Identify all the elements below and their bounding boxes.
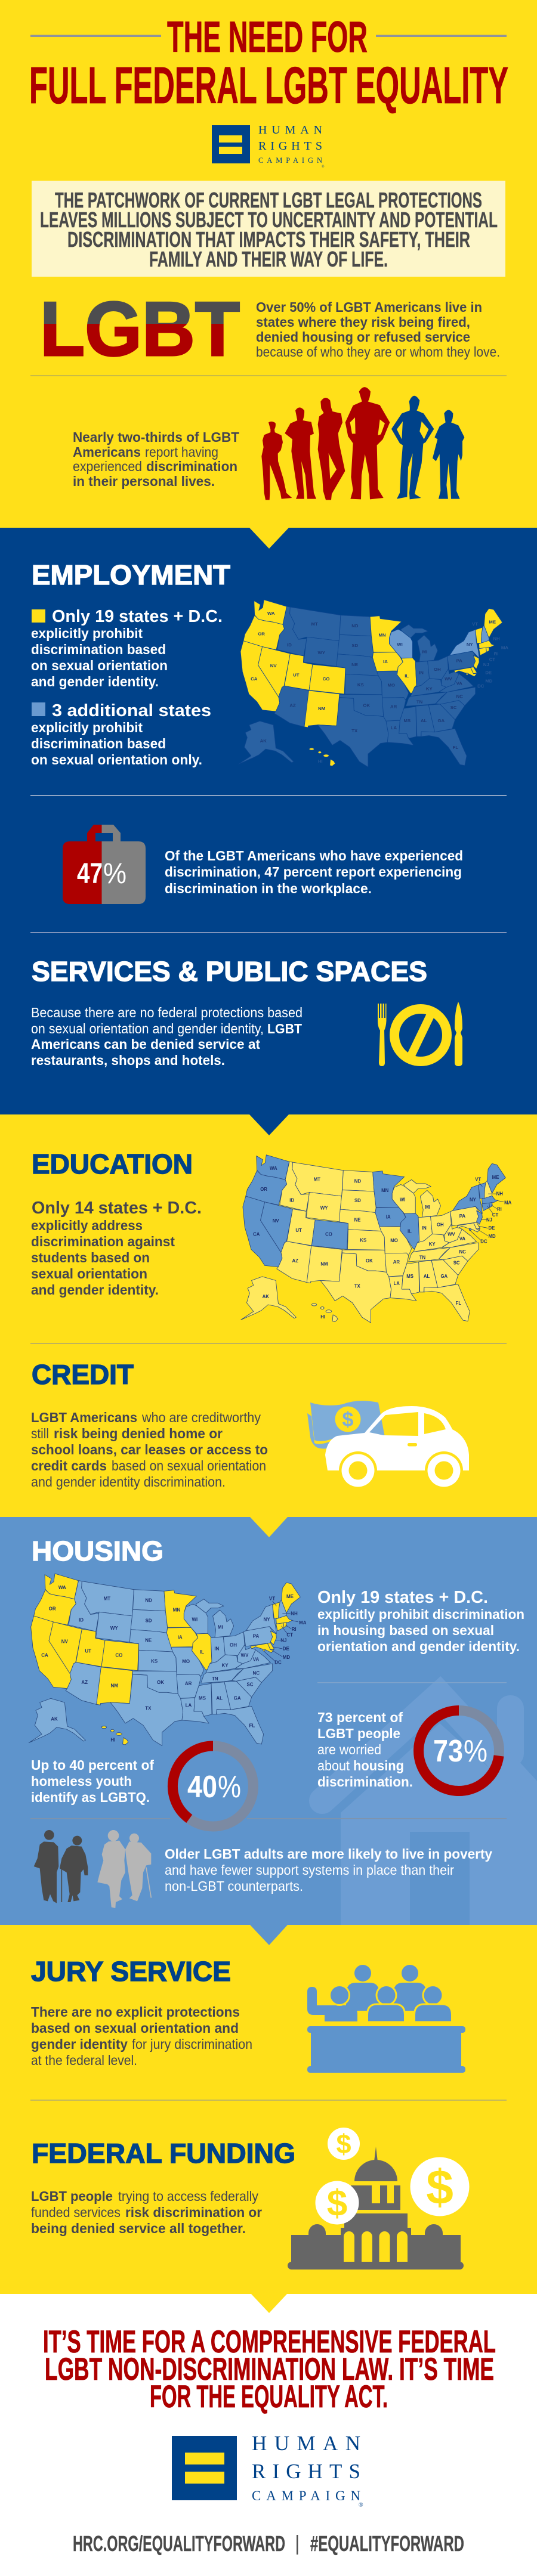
title: THE NEED FOR <box>167 13 368 61</box>
map: employment protections: DC <box>477 683 484 689</box>
text: two-thirds report discrimination: discrimination <box>146 459 237 474</box>
legend: 3 additional states: explicitly prohibit <box>31 720 143 735</box>
icon: briefcase 47 percent: 47 <box>77 858 103 890</box>
heading: federal funding: FEDERAL FUNDING <box>32 2138 295 2169</box>
map: housing protections: RI <box>292 1627 297 1632</box>
text: credit: still <box>31 1426 49 1441</box>
text: workplace discrimination: Of the LGBT Americans who have experienced <box>165 848 463 863</box>
map: housing protections: MA <box>299 1620 307 1626</box>
icon: capitol building with coins: $ <box>426 2160 453 2215</box>
map: housing protections: CO <box>115 1652 122 1658</box>
text: jury service: for jury discrimination <box>132 2036 252 2052</box>
legend: 3 additional states: 3 additional states <box>52 701 211 720</box>
map: education protections: DC <box>480 1239 487 1244</box>
map: education protections: IL <box>408 1228 412 1234</box>
map: housing protections: CT <box>286 1633 293 1638</box>
map: housing protections: WI <box>192 1617 197 1623</box>
map: education protections: NH <box>496 1191 503 1197</box>
chart: 40 percent donut: % <box>218 1770 241 1804</box>
map: employment protections: FL <box>453 745 458 750</box>
map: housing protections: NH <box>291 1611 298 1617</box>
map: housing protections: MD <box>283 1655 290 1660</box>
icon: briefcase 47 percent: % <box>103 858 126 890</box>
map: education protections: WV <box>448 1232 455 1237</box>
text: services: on sexual orientation and gender identity, <box>31 1021 264 1036</box>
logo: Human Rights Campaign <box>212 123 325 169</box>
map: employment protections: RI <box>494 651 499 657</box>
text: services: restaurants, shops and hotels. <box>31 1052 225 1068</box>
map: housing protections: ME <box>286 1594 294 1599</box>
logo: Human Rights Campaign: RIGHTS <box>258 140 322 153</box>
arrow: yellow pointer <box>251 2294 287 2313</box>
icon: jury box <box>307 1965 465 2073</box>
map: education protections: VT <box>475 1176 481 1182</box>
text: 73 percent worried <box>317 1710 413 1789</box>
map: employment protections: MT <box>311 621 318 627</box>
map: education protections: PA <box>459 1213 465 1219</box>
map: education protections: ID <box>289 1197 294 1203</box>
text: 73 percent worried: discrimination. <box>317 1774 413 1789</box>
map: employment protections: IN <box>419 670 424 675</box>
text: jury service: at the federal level. <box>31 2052 137 2068</box>
map: housing protections: GA <box>234 1695 241 1701</box>
logo: Human Rights Campaign: HUMAN <box>258 123 322 137</box>
arrow: light blue pointer <box>250 1925 288 1945</box>
text: services <box>31 1005 303 1068</box>
text: housing protections: in housing based on sexual <box>317 1623 494 1638</box>
map: employment protections: CT <box>489 657 495 662</box>
map: education protections: WY <box>320 1205 328 1210</box>
text: education: discrimination against <box>31 1234 175 1249</box>
map: education protections: DE <box>489 1225 495 1231</box>
legend: 19 states plus DC: on sexual orientation <box>31 658 168 673</box>
map: housing protections: VA <box>253 1657 259 1662</box>
heading: services and public spaces: SERVICES & PUBLIC SPACES <box>32 956 427 987</box>
logo: Human Rights Campaign footer <box>172 2432 363 2509</box>
map: employment protections: OH <box>434 667 441 672</box>
map: employment protections: AR <box>390 704 397 710</box>
map: education protections: MS <box>406 1274 413 1279</box>
map: housing protections: LA <box>186 1703 192 1708</box>
map: housing protections: SD <box>145 1618 152 1623</box>
heading: jury service: JURY SERVICE <box>31 1956 231 1987</box>
text: homeless youth: Up to 40 percent of <box>31 1757 154 1773</box>
legend: 19 states plus DC: and gender identity. <box>31 674 159 689</box>
map: employment protections: LA <box>391 725 397 730</box>
map: education protections: FL <box>456 1301 461 1306</box>
text: education: students based on <box>31 1250 150 1265</box>
map: education protections: OH <box>437 1222 444 1227</box>
map: employment protections: OR <box>258 631 265 637</box>
text: federal funding: LGBT people <box>31 2188 113 2204</box>
legend: 3 additional states: on sexual orientation only. <box>31 752 202 767</box>
map: employment protections: AL <box>421 718 427 723</box>
text: education: sexual orientation <box>31 1266 147 1281</box>
text: credit: based on sexual orientation <box>112 1458 266 1473</box>
map: education protections: UT <box>295 1228 302 1233</box>
map: education protections: NV <box>273 1218 279 1224</box>
map: housing protections <box>29 1574 307 1746</box>
map: education protections: TX <box>354 1284 361 1289</box>
text: credit: LGBT Americans <box>31 1410 137 1425</box>
footer links: HRC.ORG/EQUALITYFORWARD <box>73 2531 285 2556</box>
panel: intro <box>0 0 537 528</box>
legend: 19 states plus DC: Only 19 states + D.C. <box>52 607 223 626</box>
text: two-thirds report discrimination: Nearly two-thirds of LGBT <box>73 429 239 445</box>
text: 73 percent worried: housing <box>353 1758 404 1773</box>
map: education protections: KS <box>360 1238 366 1243</box>
text: federal funding: being denied service all together. <box>31 2221 246 2236</box>
map: employment protections: MO <box>388 683 395 688</box>
legend: 19 states plus DC: explicitly prohibit <box>31 626 143 641</box>
map: housing protections: NJ <box>280 1637 286 1643</box>
text: housing protections: explicitly prohibit discrimination <box>317 1606 524 1622</box>
map: housing protections: IN <box>214 1646 220 1651</box>
map: education protections: AL <box>424 1274 430 1279</box>
map: housing protections: NC <box>253 1670 260 1676</box>
map: education protections: HI <box>320 1314 325 1320</box>
logo: Human Rights Campaign footer: RIGHTS <box>252 2460 360 2483</box>
map: education protections: RI <box>497 1206 502 1212</box>
map: employment protections: SD <box>351 643 359 648</box>
text: credit: risk being denied home or <box>54 1426 223 1441</box>
panel: call to action <box>0 2294 537 2576</box>
map: employment protections: MA <box>501 645 508 650</box>
text: older adults: non-LGBT counterparts. <box>165 1878 303 1894</box>
map: employment protections: WI <box>397 642 403 647</box>
text: over 50 percent: because of who they are or whom they love. <box>256 344 500 360</box>
text: 73 percent worried: LGBT people <box>317 1726 400 1741</box>
map: education protections: OR <box>260 1187 267 1192</box>
map: employment protections: NE <box>351 662 358 667</box>
map: housing protections: AR <box>185 1681 192 1686</box>
map: housing protections: SC <box>246 1682 254 1688</box>
icon: older adults silhouettes <box>34 1830 151 1908</box>
map: housing protections: WA <box>58 1585 66 1590</box>
map: housing protections: ND <box>145 1598 152 1603</box>
map: employment protections: KY <box>426 686 433 692</box>
map: employment protections: NV <box>270 663 277 668</box>
map: housing protections: IL <box>200 1649 204 1655</box>
text: federal funding: funded services <box>31 2205 121 2220</box>
text: workplace discrimination <box>165 848 463 896</box>
text: credit: and gender identity discrimination. <box>31 1474 226 1490</box>
map: education protections: GA <box>440 1274 448 1279</box>
heading: education: EDUCATION <box>32 1148 193 1179</box>
map: housing protections: DE <box>283 1646 290 1651</box>
text: jury service: based on sexual orientation and <box>31 2020 239 2036</box>
text: over 50 percent: denied housing or refused service <box>256 329 470 345</box>
intro statement box: FAMILY AND THEIR WAY OF LIFE. <box>149 247 388 271</box>
text: 73 percent worried: 73 percent of <box>317 1710 403 1725</box>
map: education protections: SC <box>453 1261 460 1266</box>
map: housing protections: TX <box>145 1706 152 1711</box>
map: housing protections: CA <box>41 1652 48 1658</box>
map: employment protections: CA <box>251 676 258 682</box>
map: education protections: IA <box>386 1214 391 1219</box>
map: education protections: NC <box>459 1249 466 1255</box>
map: housing protections: MO <box>182 1659 190 1664</box>
legend: 19 states plus DC: discrimination based <box>31 642 166 657</box>
call to action headline <box>43 2324 496 2414</box>
logo: Human Rights Campaign: CAMPAIGN <box>258 156 322 165</box>
map: employment protections: NJ <box>483 662 489 667</box>
map: employment protections: UT <box>293 673 300 678</box>
text: education: Only 14 states + D.C. <box>32 1199 202 1218</box>
map: housing protections: AK <box>51 1716 58 1722</box>
arrow: yellow pointer <box>249 528 289 549</box>
icon: plate with fork and knife <box>378 1002 462 1066</box>
map: education protections: AZ <box>292 1258 298 1264</box>
map: employment protections: AZ <box>289 703 296 708</box>
map: employment protections: TX <box>351 728 358 733</box>
map: housing protections: KY <box>221 1662 229 1668</box>
map: housing protections: OK <box>157 1680 164 1685</box>
map: education protections: NJ <box>486 1217 492 1222</box>
text: homeless youth: homeless youth <box>31 1773 132 1789</box>
map: employment protections: WY <box>318 650 326 655</box>
map: education protections: TN <box>419 1255 425 1260</box>
map: education protections: NE <box>354 1218 360 1223</box>
map: employment protections: WA <box>267 611 275 616</box>
map: education protections: ND <box>354 1178 361 1184</box>
map: employment protections: MN <box>378 633 386 638</box>
text: homeless youth: identify as LGBTQ. <box>31 1789 150 1805</box>
icon: capitol building with coins: $ <box>336 2129 351 2159</box>
map: housing protections: VT <box>269 1596 275 1602</box>
map: education protections: NY <box>470 1197 477 1202</box>
map: housing protections: ID <box>79 1618 84 1623</box>
chart: 40 percent donut <box>172 1746 253 1826</box>
text: jury service <box>31 2004 252 2068</box>
map: education protections: MT <box>314 1176 320 1182</box>
map: housing protections: IA <box>178 1634 183 1640</box>
text: jury service: gender identity <box>31 2036 128 2052</box>
map: employment protections: ID <box>287 642 292 648</box>
text: over 50 percent <box>256 299 500 360</box>
map: housing protections: TN <box>212 1676 218 1682</box>
map: employment protections: IL <box>405 673 409 679</box>
text: services: LGBT <box>267 1021 302 1036</box>
map: housing protections: AZ <box>81 1680 88 1685</box>
logo: Human Rights Campaign footer: CAMPAIGN <box>252 2488 360 2503</box>
map: employment protections: PA <box>456 658 462 663</box>
call to action headline: FOR THE EQUALITY ACT. <box>150 2379 388 2414</box>
map: housing protections: AL <box>216 1695 223 1701</box>
text: education: and gender identity. <box>31 1282 159 1298</box>
arrow: yellow pointer <box>250 1517 288 1537</box>
text: two-thirds report discrimination: experienced <box>73 459 142 474</box>
map: employment protections: GA <box>438 718 445 723</box>
text: older adults <box>165 1846 492 1894</box>
map: employment protections: IA <box>383 659 388 664</box>
map: housing protections: MN <box>173 1608 180 1613</box>
map: education protections: MA <box>504 1200 512 1206</box>
heading: housing: HOUSING <box>32 1535 163 1566</box>
map: education protections: CT <box>492 1212 499 1218</box>
text: housing protections <box>317 1588 524 1654</box>
map: housing protections: NV <box>61 1639 69 1644</box>
map: housing protections: WV <box>241 1652 249 1658</box>
map: education protections: MI <box>425 1205 430 1210</box>
text: over 50 percent: states where they risk being fired, <box>256 314 470 330</box>
map: housing protections: NE <box>145 1638 152 1643</box>
icon: capitol building with coins: $ <box>327 2183 347 2224</box>
map: education protections: MN <box>381 1188 389 1193</box>
text: education: explicitly address <box>31 1218 143 1233</box>
map: housing protections: FL <box>249 1723 255 1729</box>
chart: 73 percent donut: 73 <box>433 1734 463 1769</box>
text: credit: who are creditworthy <box>141 1410 261 1425</box>
map: education protections: AK <box>263 1294 269 1299</box>
logo: Human Rights Campaign footer: HUMAN <box>252 2432 360 2455</box>
map: housing protections: OR <box>49 1606 56 1612</box>
map: employment protections: SC <box>450 705 457 710</box>
map: employment protections: MS <box>403 718 411 723</box>
chart: 40 percent donut: 40 <box>187 1770 217 1804</box>
map: housing protections: OH <box>230 1643 237 1648</box>
map: employment protections: VT <box>472 621 478 627</box>
panel: jury service and federal funding <box>0 1925 537 2294</box>
icon: briefcase 47 percent <box>63 825 146 904</box>
chart: 73 percent donut <box>419 1710 499 1791</box>
map: education protections: NM <box>320 1262 328 1267</box>
map: employment protections: NY <box>467 642 474 647</box>
text: homeless youth <box>31 1757 154 1805</box>
map: employment protections: NM <box>318 706 325 711</box>
text: services: Because there are no federal protections based <box>31 1005 303 1020</box>
map: employment protections: VA <box>456 680 462 686</box>
map: education protections: AR <box>393 1259 400 1265</box>
text: two-thirds report discrimination: report having <box>145 444 218 460</box>
map: housing protections: DC <box>274 1659 282 1665</box>
map: housing protections: MS <box>199 1695 206 1701</box>
text: workplace discrimination: discrimination, 47 percent report experiencing <box>165 864 462 880</box>
map: housing protections: MI <box>218 1624 223 1630</box>
heading: credit: CREDIT <box>32 1359 134 1390</box>
logo: Human Rights Campaign footer: ® <box>359 2502 363 2509</box>
panel: employment and services <box>0 528 537 1114</box>
map: employment protections: MD <box>485 679 493 684</box>
text: 73 percent worried: are worried <box>317 1742 381 1757</box>
icon: car and dollar bill <box>307 1401 469 1490</box>
arrow: blue pointer <box>249 1114 289 1135</box>
text: two-thirds report discrimination: in their personal lives. <box>73 473 215 489</box>
legend: 3 additional states: discrimination based <box>31 736 166 751</box>
map: employment protections: OK <box>363 703 371 708</box>
map: education protections: WI <box>400 1197 406 1202</box>
text: two-thirds report discrimination: Americans <box>73 444 141 460</box>
text: services: Americans can be denied service at <box>31 1036 260 1052</box>
icon: house watermark <box>322 1695 537 1925</box>
icon: car and dollar bill: $ <box>342 1408 354 1431</box>
heading: employment: EMPLOYMENT <box>32 559 230 590</box>
icon: group of six silhouettes <box>261 387 464 500</box>
map: housing protections: NM <box>110 1683 118 1689</box>
map: employment protections: MI <box>422 649 427 654</box>
map: employment protections: ND <box>351 623 359 628</box>
map: education protections: VA <box>459 1236 465 1241</box>
map: housing protections: PA <box>253 1634 259 1639</box>
text: workplace discrimination: discrimination in the workplace. <box>165 881 372 896</box>
map: employment protections: NC <box>456 693 463 699</box>
map: education protections: OK <box>366 1258 373 1264</box>
text: housing protections: orientation and gender identity. <box>317 1639 520 1654</box>
map: employment protections: WV <box>445 676 452 682</box>
map: education protections: SD <box>354 1198 361 1203</box>
map: employment protections: KS <box>357 682 364 688</box>
icon: capitol building with coins <box>288 2128 469 2270</box>
map: education protections: LA <box>393 1281 400 1286</box>
map: education protections <box>241 1155 512 1323</box>
map: employment protections <box>239 600 508 767</box>
text: education <box>31 1199 202 1298</box>
text: 73 percent worried: about <box>317 1758 350 1773</box>
map: housing protections: KS <box>151 1659 158 1664</box>
map: employment protections: TN <box>416 699 423 705</box>
text: credit: school loans, car leases or access to <box>31 1442 268 1457</box>
text: two-thirds report discrimination <box>73 429 239 489</box>
text: housing protections: Only 19 states + D.C. <box>317 1588 488 1607</box>
text: older adults: Older LGBT adults are more likely to live in poverty <box>165 1846 492 1862</box>
text: jury service: There are no explicit protections <box>31 2004 240 2020</box>
map: employment protections: ME <box>489 620 496 625</box>
map: employment protections: HI <box>318 758 323 764</box>
legend: 19 states plus DC <box>31 607 223 689</box>
map: employment protections: DE <box>485 670 492 675</box>
panel: education and credit <box>0 1114 537 1517</box>
map: education protections: CA <box>253 1232 260 1237</box>
LGBT two-tone wordmark: LGBT <box>40 286 240 372</box>
text: federal funding: risk discrimination or <box>125 2205 262 2220</box>
map: housing protections: WY <box>110 1626 118 1631</box>
map: education protections: MO <box>390 1238 398 1243</box>
map: housing protections: NY <box>263 1617 270 1623</box>
map: employment protections: AK <box>260 738 267 744</box>
text: federal funding <box>31 2188 262 2236</box>
map: housing protections: MT <box>104 1596 110 1602</box>
map: housing protections: HI <box>110 1737 115 1742</box>
chart: 73 percent donut: % <box>464 1734 487 1769</box>
logo: Human Rights Campaign: ® <box>322 165 325 169</box>
map: employment protections: CO <box>323 676 329 682</box>
title <box>29 13 508 114</box>
map: education protections: CO <box>325 1232 332 1237</box>
intro statement box <box>32 181 505 277</box>
map: education protections: ME <box>492 1175 499 1180</box>
panel: housing <box>0 1517 537 1925</box>
text: federal funding: trying to access federally <box>118 2188 258 2204</box>
text: over 50 percent: Over 50% of LGBT Americans live in <box>256 299 482 315</box>
footer links: #EQUALITYFORWARD <box>310 2531 464 2556</box>
map: education protections: MD <box>489 1234 496 1239</box>
map: education protections: WA <box>270 1166 277 1171</box>
map: education protections: KY <box>429 1241 436 1247</box>
map: education protections: IN <box>422 1225 427 1231</box>
text: credit <box>31 1410 268 1490</box>
legend: 3 additional states <box>31 701 211 767</box>
text: older adults: and have fewer support systems in place than their <box>165 1862 454 1878</box>
map: employment protections: NH <box>493 636 500 641</box>
text: credit: credit cards <box>31 1458 107 1473</box>
map: housing protections: UT <box>85 1649 91 1654</box>
